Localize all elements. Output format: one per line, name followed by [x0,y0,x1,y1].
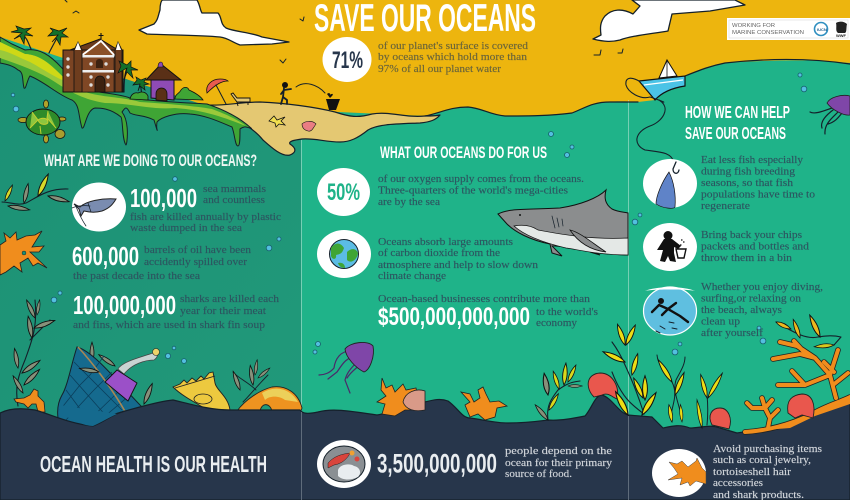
icon: diver [644,287,696,335]
coastline ink [425,59,850,116]
text: avoid purchasing: tortoiseshell hair [713,466,791,478]
icon: fish in plastic [72,182,126,232]
net lower edge over seabed [60,405,117,426]
text: eat less fish: regenerate [701,200,750,212]
stat: 100,000 sea mammals: 100,000 [130,183,197,213]
text: carbon dioxide: Oceans absorb large amounts [378,236,513,248]
coral left [0,231,47,275]
seaweed centre [534,363,582,421]
logo box: IUCN [817,27,827,32]
icon: plate of food [317,440,371,488]
red shell centre [588,373,618,399]
jellyfish right [810,95,850,134]
text: surface coverage: of our planet's surface is covered [378,40,529,52]
text: carbon dioxide: climate change [378,270,446,282]
text: avoid purchasing [713,443,822,500]
red shell right [788,394,814,418]
text: avoid purchasing: such as coral jewelry, [713,454,811,466]
shark [498,190,628,256]
text: eat less fish: Eat less fish especially [701,154,804,166]
green hill [0,37,251,146]
seaweed upper left [2,173,70,212]
church [63,33,123,92]
stat: 100,000 sea mammals: and countless [203,194,265,206]
text: eat less fish [701,154,816,212]
text: carbon dioxide [378,236,539,282]
stat badge: 71% [322,37,372,82]
sand beach [207,102,440,155]
chips packet [173,372,230,410]
stat: 600,000 barrels: accidently spilled over [144,256,247,268]
text: oxygen supply: are by the sea [378,196,440,208]
text: eat less fish: during fish breeding [701,166,796,178]
panel: left ocean column [0,60,301,440]
palm trees [11,26,149,98]
text: bring back [701,229,810,264]
stat badge: 50% [317,168,370,216]
bottom heading: ocean health: OCEAN HEALTH IS OUR HEALTH [40,451,267,477]
red shell small [710,408,730,429]
stat: ocean business value: to the world's [536,306,598,318]
text: eat less fish: populations have time to [701,188,816,200]
stat: 3,500,000,000 people: ocean for their primary [505,457,613,469]
heading: how we can help [685,102,790,143]
text: avoid purchasing: Avoid purchasing items [713,443,822,455]
logo box [727,18,850,40]
seaweed lower left [11,299,55,412]
coral centre [461,387,507,420]
text: oxygen supply [378,173,584,208]
stat: ocean business value: economy [536,317,578,329]
boat and fishing line [626,60,685,180]
icon: coral in circle [652,449,706,497]
text: carbon dioxide: of carbon dioxide from the [378,247,500,259]
logo box: WWF [836,33,847,38]
icon: globe [317,230,371,278]
text: avoid purchasing: accessories [713,477,763,489]
stat: 100,000 sea mammals [130,183,281,234]
stat badge: 50%: 50% [327,179,360,206]
text: clean up: the beach, always [701,304,782,316]
logo box: MARINE CONSERVATION [732,30,804,36]
seabed divider lines [302,412,628,500]
figure throwing litter into bin [280,59,340,110]
stat: 100,000 sea mammals: sea mammals [203,183,266,195]
stat: 100,000,000 sharks: year for their meat [180,305,266,317]
birds [65,0,623,55]
stat: 100,000,000 sharks: and fins, which are used in shark fin soup [73,319,266,331]
text: surface coverage: by oceans which hold more than [378,51,528,63]
heading: what our oceans do: WHAT OUR OCEANS DO FOR US [380,144,547,162]
seaweed right group [656,355,724,428]
dividers [302,100,628,500]
text: clean up: Whether you enjoy diving, [701,281,823,293]
star and shell on beach [269,116,316,131]
stat: ocean business value [378,293,598,331]
stat: ocean business value: $500,000,000,000 [378,303,530,331]
text: bring back: Bring back your chips [701,229,802,241]
stat: 3,500,000,000 people: source of food. [505,468,572,480]
fishing net, bottle and debris [58,342,160,427]
text: carbon dioxide: atmosphere and help to slow down [378,259,539,271]
stat: 100,000 sea mammals: fish are killed annually by plastic [130,211,281,223]
stat: 100,000,000 sharks [73,290,280,331]
stat: 600,000 barrels: 600,000 [72,241,139,271]
icon: fish on hook [643,159,697,208]
umbrella and deck chair [207,79,250,106]
stat: 600,000 barrels [72,241,252,282]
text: clean up [701,281,823,339]
stat: 3,500,000,000 people [377,445,613,480]
heading: how we can help: SAVE OUR OCEANS [685,123,786,143]
text: oxygen supply: of our oxygen supply comes from the oceans. [378,173,584,185]
text: clean up: clean up [701,316,741,328]
icon: person with bin [643,223,697,271]
seabed [0,395,850,500]
weed and shrimp [231,360,302,411]
jellyfish centre [319,342,373,393]
text: clean up: after yourself [701,327,763,339]
sky [0,0,850,116]
big coral right [745,341,850,432]
stat: 100,000,000 sharks: 100,000,000 [73,290,176,320]
cloud left [139,0,289,45]
text: oxygen supply: Three-quarters of the world's mega-cities [378,184,568,196]
stat: 100,000,000 sharks: sharks are killed each [180,293,280,305]
logo box: WORKING FOR [732,23,775,29]
stat: 3,500,000,000 people: people depend on the [505,445,612,457]
text: clean up: surfing,or relaxing on [701,292,802,304]
text: eat less fish: seasons, so that fish [701,177,794,189]
stat: 600,000 barrels: the past decade into the sea [73,270,200,282]
cloud right [593,0,745,41]
seaweed tall cluster [602,324,658,416]
text: surface coverage [378,40,529,75]
hut [130,62,203,101]
text: bring back: packets and bottles and [701,241,810,253]
stat: 3,500,000,000 people: 3,500,000,000 [377,448,497,478]
stat badge: 71%: 71% [332,47,363,74]
bubbles [11,73,807,363]
seaweed upper right [775,314,841,349]
heading: what are we doing: WHAT ARE WE DOING TO OUR OCEANS? [44,152,257,170]
stat: 100,000 sea mammals: waste dumped in the sea [130,222,242,234]
stat: 600,000 barrels: barrels of oil have been [144,244,252,256]
text: surface coverage: 97% of all our planet water [378,63,501,75]
text: bring back: throw them in a bin [701,252,793,264]
coral and shell centre left [377,378,425,416]
turtle [18,100,66,143]
stat: ocean business value: Ocean-based businesses contribute more than [378,293,591,305]
